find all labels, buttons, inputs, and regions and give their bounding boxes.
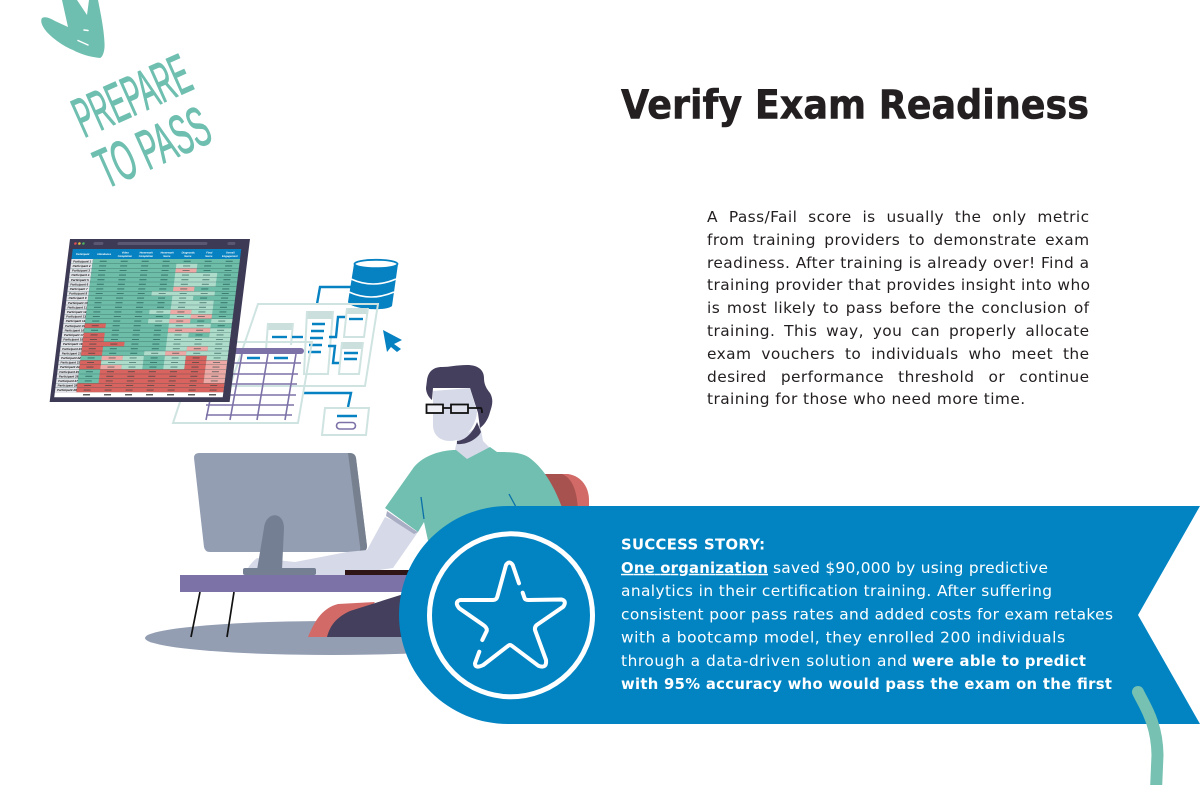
row labels: Participant 1 — [73, 259, 92, 263]
row labels: Participant 19 — [63, 342, 83, 346]
handwritten label: prepare to pass — [63, 42, 220, 200]
body text block: from training providers to demonstrate exam — [707, 231, 1090, 249]
row labels: Participant 27 — [58, 379, 78, 383]
success story text: One organization — [621, 560, 768, 577]
success story text: through a data-driven solution and — [621, 652, 907, 670]
body text block: desired performance threshold or continue — [707, 368, 1090, 386]
title: Verify Exam Readiness — [621, 82, 1089, 128]
connector: first to second node — [292, 336, 303, 338]
neck — [455, 425, 490, 460]
success story text: saved $90,000 by using predictive — [773, 559, 1048, 577]
row labels: Participant 4 — [71, 273, 90, 277]
connector: second to fourth node — [328, 346, 340, 363]
table header: Engagement — [222, 254, 238, 258]
body text block: readiness. After training is already over! Find a — [707, 254, 1090, 272]
panel: flow chart — [230, 304, 378, 386]
row labels — [57, 259, 93, 392]
keyboard — [345, 570, 415, 576]
table header: Overall — [226, 251, 235, 254]
row labels: Participant 29 — [57, 388, 77, 392]
table header: Homework — [139, 251, 154, 254]
success story text — [621, 536, 1113, 693]
row labels: Participant 25 — [59, 370, 80, 374]
row labels: Participant 9 — [68, 296, 87, 300]
table header: Score — [205, 254, 213, 258]
monitor — [194, 453, 367, 552]
row labels: Participant 11 — [67, 305, 87, 309]
row labels: Participant 20 — [62, 347, 82, 351]
connector: second to third node — [329, 317, 347, 337]
legs — [327, 592, 430, 637]
body text block — [707, 208, 1090, 408]
row labels: Participant 12 — [67, 310, 87, 314]
row labels: Participant 16 — [64, 328, 85, 332]
body text block: is most likely to pass before the conclusion of — [707, 299, 1090, 317]
brush stroke decoration bottom right — [1138, 692, 1158, 785]
table header: Score — [163, 254, 171, 258]
table header: Homework — [160, 251, 175, 254]
row labels: Participant 23 — [60, 361, 81, 365]
table header: Score — [184, 254, 192, 258]
row labels: Participant 26 — [59, 374, 79, 378]
table header: Video — [122, 251, 129, 254]
data flow diagram — [173, 260, 402, 435]
glasses — [426, 404, 482, 413]
table header: Participant — [76, 252, 90, 256]
success story banner — [399, 506, 1200, 724]
icon: star in circle — [430, 534, 592, 697]
success story text: SUCCESS STORY: — [621, 536, 765, 554]
body text block: training provider that provides insight into who — [707, 276, 1090, 294]
monitor stand — [243, 515, 316, 575]
row grid lines — [55, 264, 239, 388]
row labels: Participant 21 — [61, 351, 82, 355]
success story text: with 95% accuracy who would pass the exam on the first — [621, 676, 1112, 693]
box: second node — [304, 311, 333, 374]
banner ribbon — [399, 506, 1200, 724]
body text block: A Pass/Fail score is usually the only metric — [707, 208, 1090, 226]
success story text: consistent poor pass rates and added costs for exam retakes — [621, 605, 1113, 623]
chair back — [545, 474, 589, 510]
table totals row — [54, 392, 223, 397]
table header: Attendance — [97, 252, 112, 256]
panel: purple table — [173, 342, 312, 423]
row labels: Participant 5 — [71, 278, 89, 282]
row labels: Participant 6 — [70, 282, 89, 286]
row labels: Participant 15 — [65, 324, 85, 328]
row labels: Participant 8 — [69, 292, 88, 296]
arm and hand — [247, 517, 418, 575]
table body: heat map cells — [55, 259, 240, 392]
row labels: Participant 18 — [63, 338, 84, 342]
brush stroke decoration top left — [41, 0, 105, 58]
beard shadow — [457, 422, 481, 444]
row labels: Participant 7 — [70, 287, 88, 291]
panel: small card — [322, 408, 369, 435]
floor shadow — [145, 621, 519, 655]
window frame — [50, 239, 250, 402]
handwritten label: prepare to pass: TO PASS — [85, 94, 220, 200]
row labels: Participant 10 — [68, 301, 88, 305]
chair seat — [308, 602, 375, 637]
row labels: Participant 13 — [66, 315, 86, 319]
body text block: training. This way, you can properly allocate — [707, 322, 1090, 340]
shirt — [385, 447, 563, 560]
row labels: Participant 17 — [64, 333, 84, 337]
box: third node — [344, 308, 368, 337]
success story text: were able to predict — [912, 653, 1086, 670]
cell value marks — [77, 261, 240, 390]
connector: database to panel — [317, 287, 352, 304]
window controls — [74, 242, 236, 245]
table header: Diagnostic — [181, 251, 196, 254]
hair — [426, 365, 492, 428]
row labels: Participant 28 — [57, 384, 78, 388]
spreadsheet window — [50, 239, 250, 402]
table header — [72, 249, 241, 259]
box: fourth node — [339, 342, 363, 374]
table header: Completion — [138, 254, 154, 258]
success story text: with a bootcamp model, they enrolled 200 individuals — [621, 628, 1065, 646]
success story text: analytics in their certification training. After suffering — [621, 582, 1052, 600]
row labels: Participant 22 — [61, 356, 81, 360]
row labels: Participant 24 — [60, 365, 80, 369]
box: first node — [266, 323, 293, 350]
desk legs — [191, 592, 234, 637]
row labels: Participant 14 — [65, 319, 86, 323]
icon: cursor arrow — [383, 330, 402, 352]
table header: Completion — [117, 254, 133, 258]
person at computer — [145, 365, 589, 655]
connector: table to small card — [304, 393, 351, 407]
desk — [180, 575, 415, 592]
table header: Final — [206, 251, 213, 254]
body text block: training for those who need more time. — [707, 390, 1026, 408]
body text block: exam vouchers to individuals who meet the — [707, 345, 1090, 363]
row labels: Participant 3 — [72, 269, 91, 273]
face — [433, 388, 477, 441]
row labels: Participant 2 — [72, 264, 91, 268]
icon: database — [348, 260, 398, 309]
